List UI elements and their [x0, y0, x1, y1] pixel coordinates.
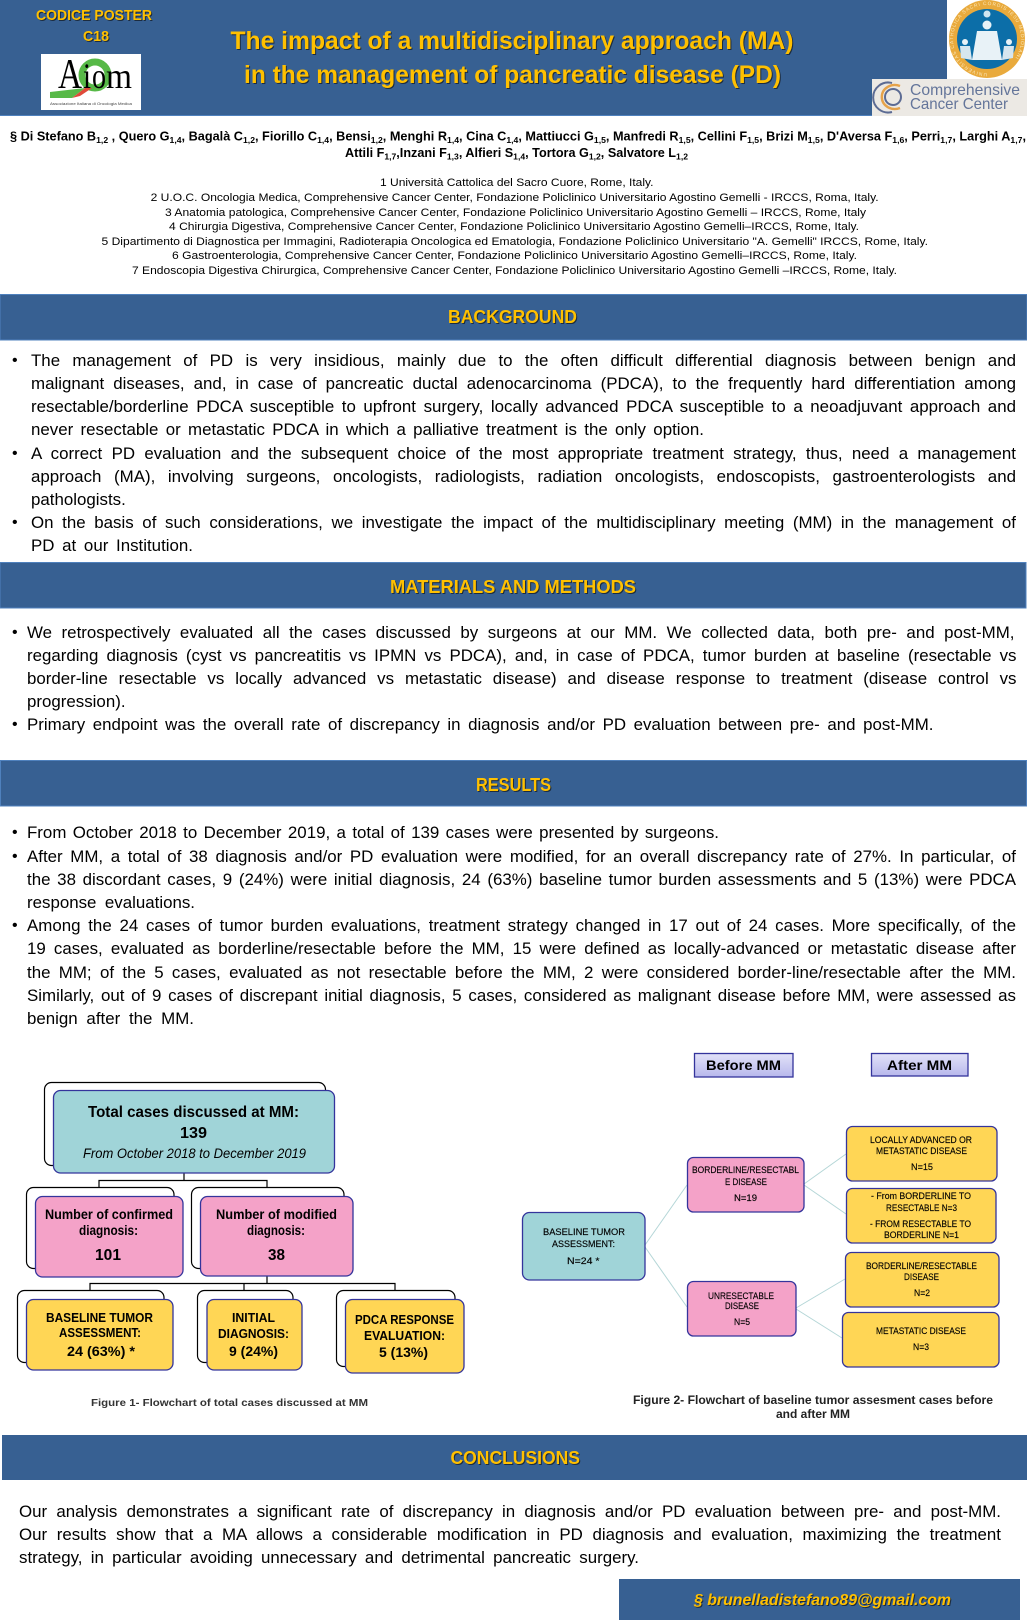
authors: 1,2	[589, 152, 601, 162]
node: initial diagnosis: DIAGNOSIS:	[218, 1326, 289, 1341]
bullet: retrospective evaluation: regarding diagnosis (cyst vs pancreatitis vs IPMN vs PDCA), and, in case of PDCA, tumor burden at baseline (resectable vs	[26, 647, 1016, 665]
node: borderline to resectable changes: - From BORDERLINE TO	[871, 1191, 971, 1202]
node: borderline/resectable after MM	[846, 1252, 999, 1307]
authors: , Menghi R	[383, 130, 447, 144]
caption: figure 2: and after MM	[776, 1409, 850, 1421]
affiliations	[102, 177, 928, 277]
authors: 1,7	[1010, 135, 1023, 145]
poster code	[36, 7, 152, 45]
authors: , Salvatore L	[601, 146, 676, 160]
authors: 1,4	[170, 135, 182, 145]
node: confirmed diagnosis: diagnosis:	[79, 1223, 138, 1238]
bullet: correct PD evaluation: •	[12, 445, 18, 462]
node: modified diagnosis: Number of modified	[216, 1207, 337, 1222]
bullet: discrepancy rate: After MM, a total of 38 diagnosis and/or PD evaluation were modified, for an overall discrepancy rate of 27%. In particular, of	[27, 848, 1016, 866]
text block: background	[12, 352, 1016, 555]
node: initial diagnosis: INITIAL	[232, 1310, 275, 1325]
authors: ,Inzani F	[396, 146, 447, 160]
bullet: discrepancy rate	[12, 848, 1016, 912]
node: borderline to resectable changes: BORDERLINE N=1	[884, 1230, 959, 1241]
column header: after MM	[872, 1054, 968, 1076]
authors: , Fiorillo C	[255, 130, 317, 144]
node: modified diagnosis: 38	[268, 1247, 285, 1264]
node: borderline/resectable after MM: DISEASE	[904, 1272, 939, 1283]
node: borderline/resectable disease	[688, 1158, 804, 1212]
authors: 1,6	[892, 135, 905, 145]
authors: 1,2	[96, 135, 108, 145]
bullet: correct PD evaluation: approach (MA), involving surgeons, oncologists, radiologists, radiation oncologists, endoscopists, gastroenterologists and	[31, 468, 1016, 486]
heading: results	[0, 760, 1026, 806]
bullet: tumor burden evaluations: 19 cases, evaluated as borderline/resectable before the MM, 15 were defined as locally-advanced or metastatic disease after	[27, 940, 1016, 958]
authors: 1,3	[447, 152, 459, 162]
text block: conclusions: strategy, in particular avoiding unnecessary and detrimental pancreatic surgery.	[19, 1549, 639, 1567]
text block: conclusions	[19, 1503, 1001, 1567]
bullet: cases presented: •	[12, 824, 18, 841]
authors: 1,4	[513, 152, 525, 162]
authors: , Manfredi R	[606, 130, 679, 144]
node: baseline tumor assessment: ASSESSMENT:	[552, 1239, 615, 1250]
node: modified diagnosis: diagnosis:	[247, 1223, 305, 1238]
heading: background	[0, 294, 1027, 340]
affiliations: 1 Università Cattolica del Sacro Cuore, Rome, Italy.	[380, 177, 654, 189]
affiliations: 4 Chirurgia Digestiva, Comprehensive Cancer Center, Fondazione Policlinico Universitario Agostino Gemelli–IRCCS, Rome, Italy.	[169, 221, 859, 233]
node: PDCA response evaluation: 5 (13%)	[379, 1345, 428, 1360]
logo: Comprehensive Cancer Center: Cancer Center	[910, 96, 1009, 113]
authors: , Brizi M	[759, 130, 808, 144]
node: confirmed diagnosis: Number of confirmed	[45, 1207, 173, 1222]
node: PDCA response evaluation: PDCA RESPONSE	[355, 1312, 454, 1327]
node: initial diagnosis: 9 (24%)	[229, 1344, 278, 1359]
authors: 1,7	[940, 135, 953, 145]
node: baseline tumor assessment: BASELINE TUMOR	[46, 1310, 154, 1325]
logo: Comprehensive Cancer Center	[872, 79, 1027, 116]
bullet: tumor burden evaluations: Among the 24 cases of tumor burden evaluations, treatment strategy changed in 17 out of 24 cases. More specifically, of the	[27, 917, 1016, 935]
bullet: tumor burden evaluations: Similarly, out of 9 cases of discrepant initial diagnosis, 5 cases, considered as malignant disease before MM, were assessed as	[27, 987, 1016, 1005]
authors: 1,2	[676, 152, 688, 162]
affiliations: 2 U.O.C. Oncologia Medica, Comprehensive Cancer Center, Fondazione Policlinico Universitario Agostino Gemelli - IRCCS, Roma, Italy.	[151, 192, 879, 204]
node: baseline tumor assessment: ASSESSMENT:	[59, 1325, 141, 1340]
affiliations: 7 Endoscopia Digestiva Chirurgica, Comprehensive Cancer Center, Fondazione Policlinico Universitario Agostino Gemelli –IRCCS, Rome, Italy.	[132, 265, 897, 277]
node: borderline to resectable changes: RESECTABLE N=3	[886, 1203, 957, 1214]
text block: conclusions: Our results show that a MA allows a considerable modification in PD diagnosis and evaluation, maximizing the treatment	[19, 1526, 1001, 1544]
bullet: management of PD: •	[12, 352, 18, 369]
logo: AIOM: A	[58, 52, 83, 98]
node: metastatic disease	[842, 1312, 999, 1367]
authors: 1,2	[371, 135, 383, 145]
node: confirmed diagnosis: 101	[95, 1247, 121, 1264]
logo: university seal: UNIVERSITAS CATHOLICA SACRI CORDIS IESU MEDIOLANI	[950, 2, 1024, 76]
node: modified diagnosis	[192, 1188, 353, 1276]
authors: , Tortora G	[525, 146, 589, 160]
connectors	[645, 1154, 846, 1338]
bullet: tumor burden evaluations: benign after the MM.	[27, 1010, 194, 1028]
node: PDCA response evaluation	[336, 1290, 464, 1373]
logo: AIOM: m	[106, 56, 132, 96]
text block: materials and methods	[12, 624, 1016, 734]
bullet: tumor burden evaluations	[12, 917, 1016, 1028]
bullet: retrospective evaluation: progression).	[26, 693, 125, 711]
figure 2: flowchart of baseline tumor assessment	[522, 1054, 999, 1367]
affiliations: 6 Gastroenterologia, Comprehensive Cancer Center, Fondazione Policlinico Universitario Agostino Gemelli–IRCCS, Rome, Italy.	[172, 250, 857, 262]
bullet: management of PD: resectable/borderline PDCA susceptible to upfront surgery, locally advanced PDCA susceptible to a neoadjuvant approach and	[31, 398, 1016, 416]
title: in the management of pancreatic disease (PD)	[244, 61, 781, 89]
node: borderline/resectable disease: BORDERLINE/RESECTABL	[692, 1165, 799, 1176]
bullet: discrepancy rate: •	[12, 848, 18, 865]
poster code: C18	[83, 28, 109, 45]
node: borderline/resectable after MM: BORDERLINE/RESECTABLE	[866, 1261, 977, 1272]
logo: Comprehensive Cancer Center: Comprehensive	[910, 82, 1020, 99]
bullet: tumor burden evaluations: •	[12, 917, 18, 934]
bullet: management of PD: never resectable or metastatic PDCA in which a palliative treatment is the only option.	[31, 421, 704, 439]
caption: figure 2: Figure 2- Flowchart of baseline tumor assesment cases before	[633, 1395, 993, 1407]
bullet: management of PD: malignant diseases, and, in case of pancreatic ductal adenocarcinoma (PDCA), to the frequently hard differentiation among	[31, 375, 1016, 393]
node: borderline/resectable after MM: N=2	[914, 1288, 930, 1299]
bullet: impact of the meeting: •	[12, 514, 18, 531]
node: locally advanced or metastatic: N=15	[911, 1162, 933, 1173]
title	[230, 27, 794, 89]
authors: 1,4	[447, 135, 459, 145]
node: baseline tumor assessment: 24 (63%) *	[67, 1344, 136, 1359]
authors: , Cina C	[459, 130, 506, 144]
node: total cases	[44, 1082, 334, 1173]
heading: materials and methods	[0, 562, 1026, 608]
bullet: impact of the meeting: PD at our Institution.	[31, 537, 193, 555]
authors	[10, 130, 1026, 162]
node: baseline tumor assessment: N=24 *	[567, 1256, 600, 1267]
bullet: primary endpoint: Primary endpoint was the overall rate of discrepancy in diagnosis and/or PD evaluation between pre- and post-MM.	[26, 716, 933, 734]
node: borderline to resectable changes: - FROM RESECTABLE TO	[870, 1219, 971, 1230]
authors: 1,7	[384, 152, 397, 162]
bullet: discrepancy rate: response evaluations.	[27, 894, 195, 912]
authors: , Bensi	[329, 130, 371, 144]
logo: AIOM: o	[92, 56, 106, 96]
bullet: correct PD evaluation: A correct PD evaluation and the subsequent choice of the most appropriate treatment strategy, thus, need a management	[31, 445, 1016, 463]
node: locally advanced or metastatic: LOCALLY ADVANCED OR	[870, 1135, 972, 1146]
node: locally advanced or metastatic: METASTATIC DISEASE	[876, 1146, 967, 1157]
column header: before MM: Before MM	[706, 1057, 781, 1073]
node: unresectable disease: N=5	[734, 1317, 750, 1328]
node: baseline tumor assessment	[522, 1212, 645, 1280]
contact email band: § brunelladistefano89@gmail.com	[693, 1592, 951, 1609]
node: initial diagnosis	[198, 1290, 302, 1370]
figure 1: flowchart of total cases	[18, 1082, 464, 1373]
column header: before MM	[694, 1054, 793, 1077]
authors: , Alfieri S	[459, 146, 513, 160]
authors: Attili F	[345, 146, 384, 160]
authors: 1,2	[243, 135, 255, 145]
node: confirmed diagnosis	[26, 1188, 183, 1277]
heading: results: RESULTS	[476, 775, 551, 795]
poster code: CODICE POSTER	[36, 7, 152, 24]
authors: , Bagalà C	[182, 130, 243, 144]
node: unresectable disease: DISEASE	[725, 1301, 759, 1312]
logo: AIOM: Associazione Italiana di Oncologia Medica	[50, 101, 133, 106]
connectors	[90, 1173, 395, 1290]
authors: , Larghi A	[952, 130, 1010, 144]
node: PDCA response evaluation: EVALUATION:	[364, 1328, 445, 1343]
bullet: retrospective evaluation	[12, 624, 1016, 711]
text block: conclusions: Our analysis demonstrates a significant rate of discrepancy in diagnosis and/or PD evaluation between pre- and post-MM.	[19, 1503, 1001, 1521]
text block: results	[12, 824, 1016, 1028]
authors: , Quero G	[108, 130, 170, 144]
node: baseline tumor assessment	[18, 1290, 173, 1370]
heading: background: BACKGROUND	[448, 307, 577, 327]
heading: conclusions: CONCLUSIONS	[450, 1448, 580, 1468]
title: The impact of a multidisciplinary approach (MA)	[230, 27, 794, 55]
node: total cases: Total cases discussed at MM:	[88, 1104, 299, 1121]
bullet: management of PD: The management of PD is very insidious, mainly due to the often difficult differential diagnosis between benign and	[31, 352, 1016, 370]
authors: § Di Stefano B	[10, 130, 95, 144]
authors: , D'Aversa F	[820, 130, 893, 144]
node: total cases: 139	[180, 1125, 207, 1142]
authors: 1,5	[747, 135, 759, 145]
authors: 1,4	[317, 135, 329, 145]
bullet: correct PD evaluation: pathologists.	[31, 491, 126, 509]
node: unresectable disease: UNRESECTABLE	[708, 1291, 774, 1302]
contact email band	[619, 1579, 1020, 1620]
node: total cases: From October 2018 to December 2019	[83, 1145, 306, 1161]
heading: materials and methods: MATERIALS AND METHODS	[390, 577, 636, 597]
node: borderline/resectable disease: N=19	[734, 1193, 757, 1204]
logo: AIOM: i	[83, 56, 91, 96]
authors: , Mattiucci G	[518, 130, 594, 144]
authors: ,	[1022, 130, 1026, 144]
node: baseline tumor assessment: BASELINE TUMOR	[543, 1227, 625, 1238]
bullet: discrepancy rate: the 38 discordant cases, 9 (24%) were initial diagnosis, 24 (63%) baseline tumor burden assessments and 5 (13%) were PDCA	[27, 871, 1016, 889]
node: locally advanced or metastatic	[846, 1126, 997, 1181]
authors: , Cellini F	[691, 130, 747, 144]
bullet: impact of the meeting: On the basis of such considerations, we investigate the impact of the multidisciplinary meeting (MM) in the management of	[31, 514, 1016, 532]
bullet: retrospective evaluation: •	[12, 624, 18, 641]
bullet: primary endpoint: •	[12, 716, 18, 733]
node: borderline/resectable disease: E DISEASE	[725, 1177, 767, 1188]
authors: 1,5	[679, 135, 691, 145]
node: unresectable disease	[688, 1282, 796, 1336]
heading: conclusions	[2, 1435, 1027, 1480]
caption: figure 1: Figure 1- Flowchart of total cases discussed at MM	[91, 1397, 368, 1409]
affiliations: 3 Anatomia patologica, Comprehensive Cancer Center, Fondazione Policlinico Universitario Agostino Gemelli – IRCCS, Rome, Italy	[165, 207, 867, 219]
bullet: impact of the meeting	[12, 514, 1016, 555]
node: metastatic disease: N=3	[913, 1342, 929, 1353]
bullet: cases presented: From October 2018 to December 2019, a total of 139 cases were presented by surgeons.	[27, 824, 719, 842]
header band	[0, 0, 1027, 116]
node: metastatic disease: METASTATIC DISEASE	[876, 1326, 966, 1337]
authors: 1,4	[506, 135, 519, 145]
bullet: correct PD evaluation	[12, 445, 1016, 509]
bullet: retrospective evaluation: We retrospectively evaluated all the cases discussed by surgeons at our MM. We collected data, both pre- and post-MM,	[26, 624, 1014, 642]
bullet: retrospective evaluation: border-line resectable vs locally advanced vs metastatic disease) and disease response to treatment (disease control vs	[26, 670, 1016, 688]
bullet: tumor burden evaluations: the MM; of the 5 cases, evaluated as not resectable before the MM, 2 were considered border-line/resectable after the MM.	[27, 964, 1016, 982]
node: borderline to resectable changes	[846, 1188, 996, 1243]
caption: figure 2	[633, 1395, 993, 1421]
logo: AIOM	[41, 52, 141, 110]
authors: 1,5	[594, 135, 606, 145]
authors: , Perri	[904, 130, 940, 144]
bullet: management of PD	[12, 352, 1016, 439]
authors: 1,5	[808, 135, 820, 145]
affiliations: 5 Dipartimento di Diagnostica per Immagini, Radioterapia Oncologica ed Ematologia, Fondazione Policlinico Universitario "A. Gemelli" IRCCS, Rome, Italy.	[102, 236, 928, 248]
column header: after MM: After MM	[887, 1057, 952, 1073]
